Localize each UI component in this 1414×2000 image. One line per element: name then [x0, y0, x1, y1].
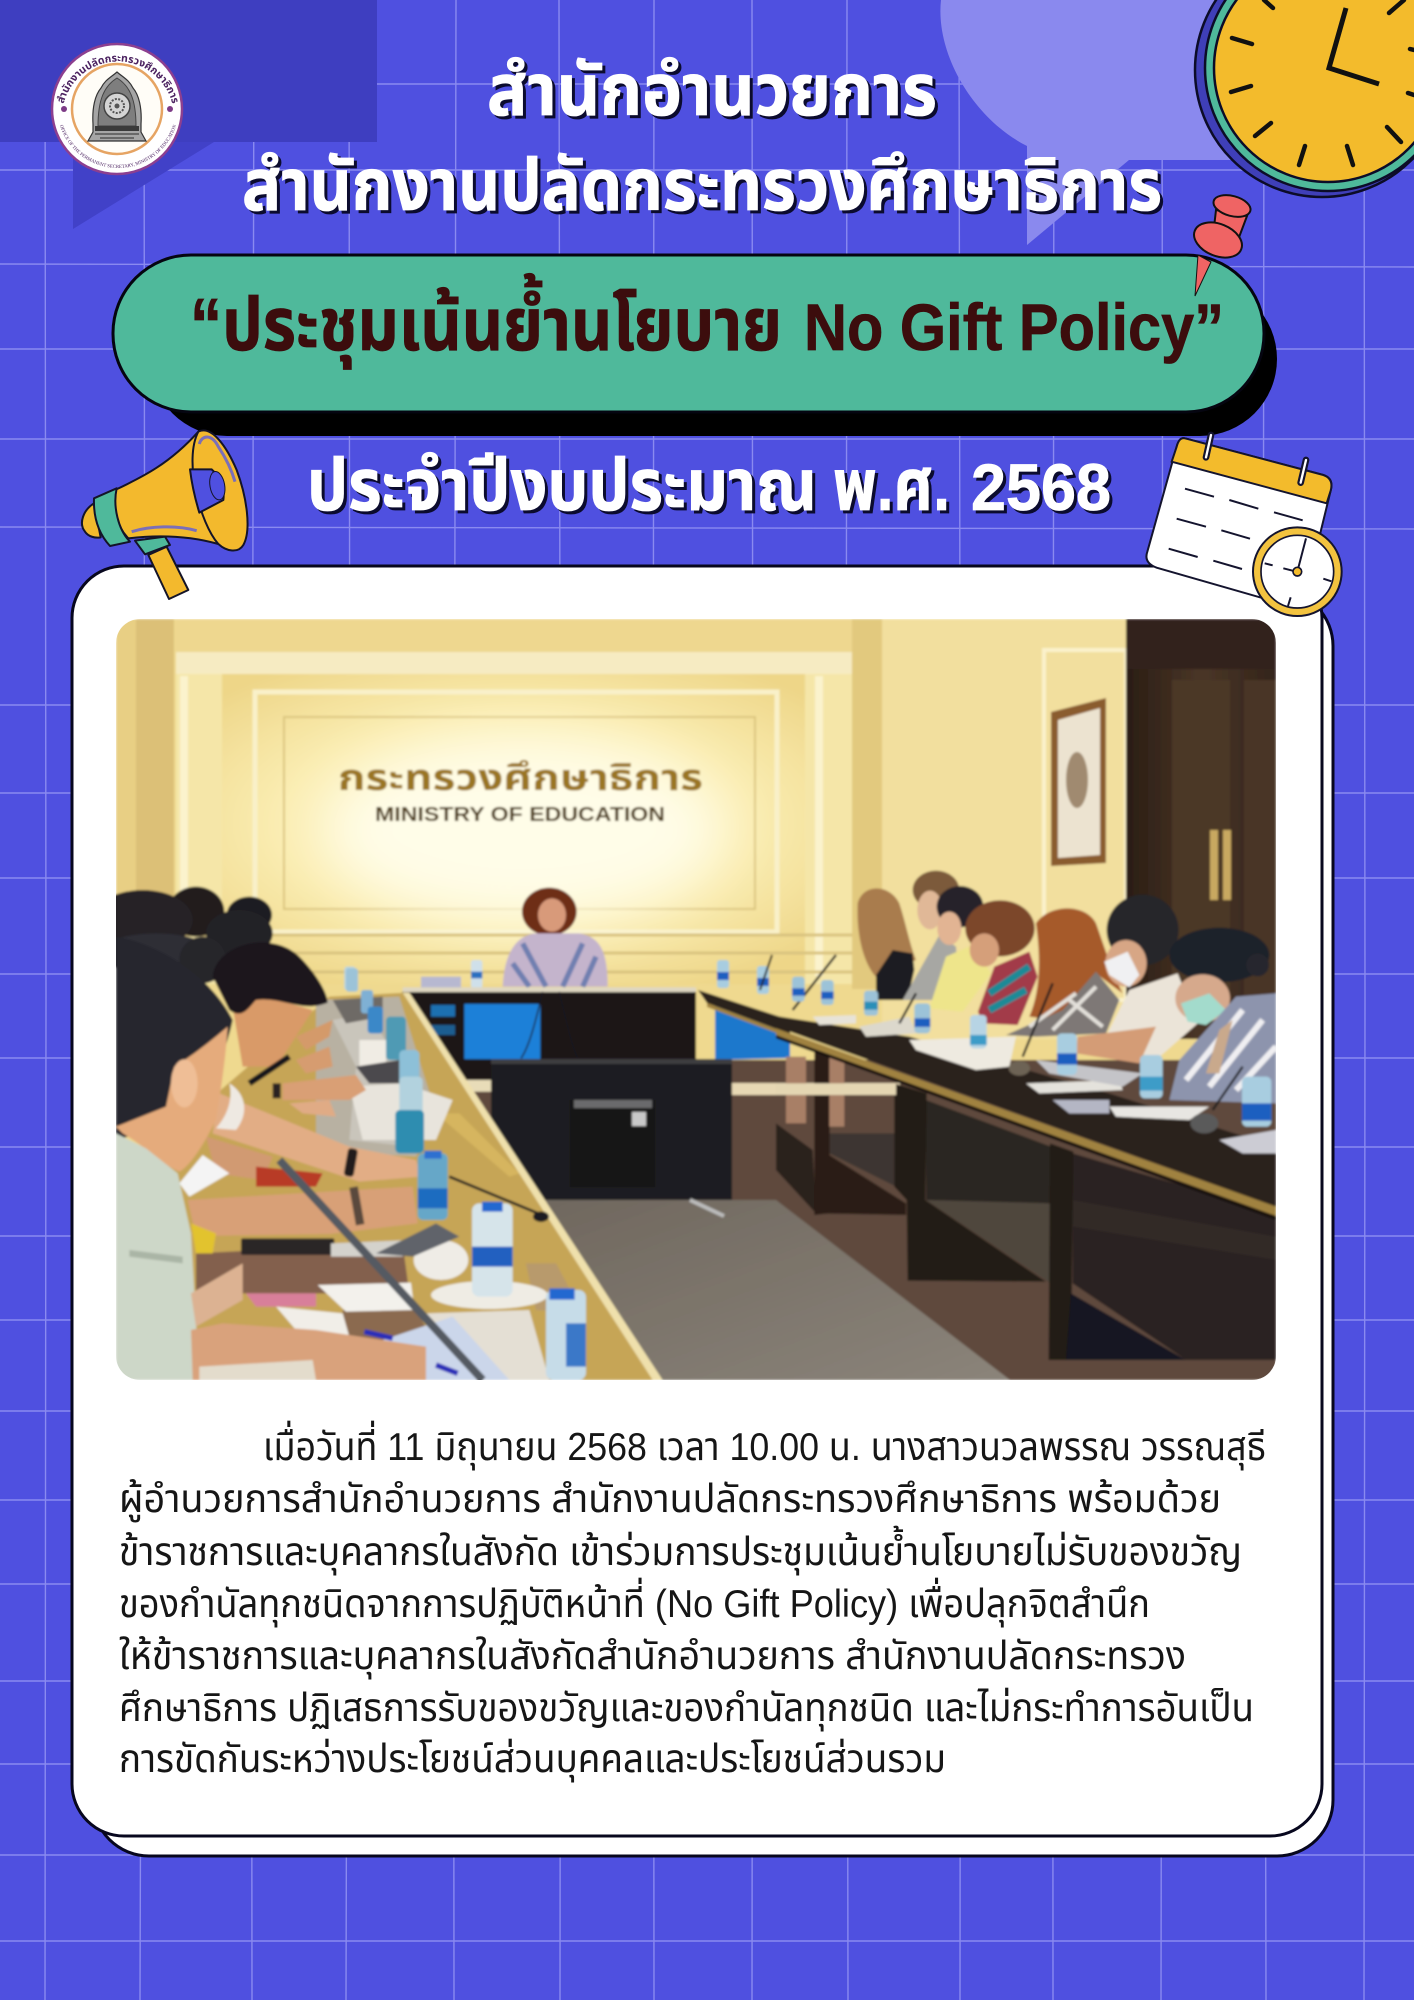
microphones [793, 955, 1243, 1110]
icon: push pin [1189, 191, 1253, 296]
subtitle: ประจำปีงบประมาณ [307, 446, 817, 526]
man head [233, 998, 313, 1068]
photo wall [124, 619, 1198, 1146]
body text: ให้ข้าราชการและบุคลากรในสังกัดสำนักอำนวยการ สำนักงานปลัดกระทรวง [119, 1635, 1186, 1679]
under-table panels [776, 1123, 816, 1213]
banner text: “ประชุมเน้นย้ำนโยบาย [190, 273, 782, 370]
panel: content card [72, 566, 1333, 1856]
title line 1: สำนักอำนวยการ [487, 51, 937, 131]
photo door [1126, 619, 1276, 1039]
photo left table and people [93, 887, 663, 1380]
body text: ศึกษาธิการ ปฏิเสธการรับของขวัญและของกำนัลทุกชนิด และไม่กระทำการอันเป็น [119, 1687, 1254, 1731]
banner text [190, 273, 1224, 370]
photo wall lettering: กระทรวงศึกษาธิการ [338, 757, 703, 798]
body text: ของกำนัลทุกชนิดจากการปฏิบัติหน้าที่ (No Gift Policy) เพื่อปลุกจิตสำนึก [119, 1577, 1150, 1627]
light speech bubble [940, 0, 1300, 245]
photo framed portrait [1051, 698, 1106, 866]
photo floor [404, 1060, 1276, 1380]
mic stems and cups [279, 1160, 483, 1380]
photo right table and people [698, 871, 1276, 1360]
photo small bottles on far right table [717, 955, 772, 994]
phone and papers [241, 1238, 334, 1255]
body text: การขัดกันระหว่างประโยชน์ส่วนบุคคลและประโยชน์ส่วนรวม [119, 1738, 946, 1782]
banner pill [113, 255, 1277, 436]
foreground woman [116, 966, 234, 1139]
decorative speech tab behind logo [0, 0, 377, 229]
icon: wall clock [1195, 0, 1414, 197]
body text: ข้าราชการและบุคลากรในสังกัด เข้าร่วมการประชุมเน้นย้ำนโยบายไม่รับของขวัญ [119, 1525, 1242, 1575]
icon: megaphone [82, 430, 248, 599]
banner text: No Gift Policy” [804, 290, 1224, 364]
table clutter [316, 997, 436, 1157]
photo: meeting room [93, 619, 1276, 1380]
arms front [213, 1093, 421, 1182]
body text: เมื่อวันที่ 11 มิถุนายน 2568 เวลา 10.00 น. นางสาวนวลพรรณ วรรณสุธี [263, 1420, 1266, 1470]
logo: office of the permanent secretary [50, 42, 184, 176]
subtitle: 2568 [971, 450, 1111, 524]
icon: calendar with clock [1146, 435, 1342, 616]
body text: ผู้อำนวยการสำนักอำนวยการ สำนักงานปลัดกระทรวงศึกษาธิการ พร้อมด้วย [119, 1478, 1221, 1522]
arms back [296, 1020, 333, 1050]
subtitle: พ.ศ. [833, 446, 950, 526]
back heads [168, 887, 224, 937]
body text [119, 1420, 1266, 1782]
photo back table [402, 987, 696, 1092]
water bottles [792, 977, 1271, 1127]
gold table [171, 992, 653, 1380]
table papers [813, 1015, 856, 1025]
people [857, 888, 916, 977]
logo ring text top: สำนักงานปลัดกระทรวงศึกษาธิการ [56, 56, 178, 104]
photo carpet [520, 1200, 1010, 1380]
photo: meeting room: MINISTRY OF EDUCATION [375, 804, 665, 826]
photo chairperson [344, 888, 608, 990]
logo emblem [88, 72, 146, 141]
table top [776, 1016, 1276, 1207]
title line 2: สำนักงานปลัดกระทรวงศึกษาธิการ [242, 146, 1162, 226]
logo ring text bottom: OFFICE OF THE PERMANENT SECRETARY, MINISTRY OF EDUCATION [60, 124, 176, 168]
bottles left [346, 968, 586, 1380]
photo monitor back [491, 1059, 732, 1216]
